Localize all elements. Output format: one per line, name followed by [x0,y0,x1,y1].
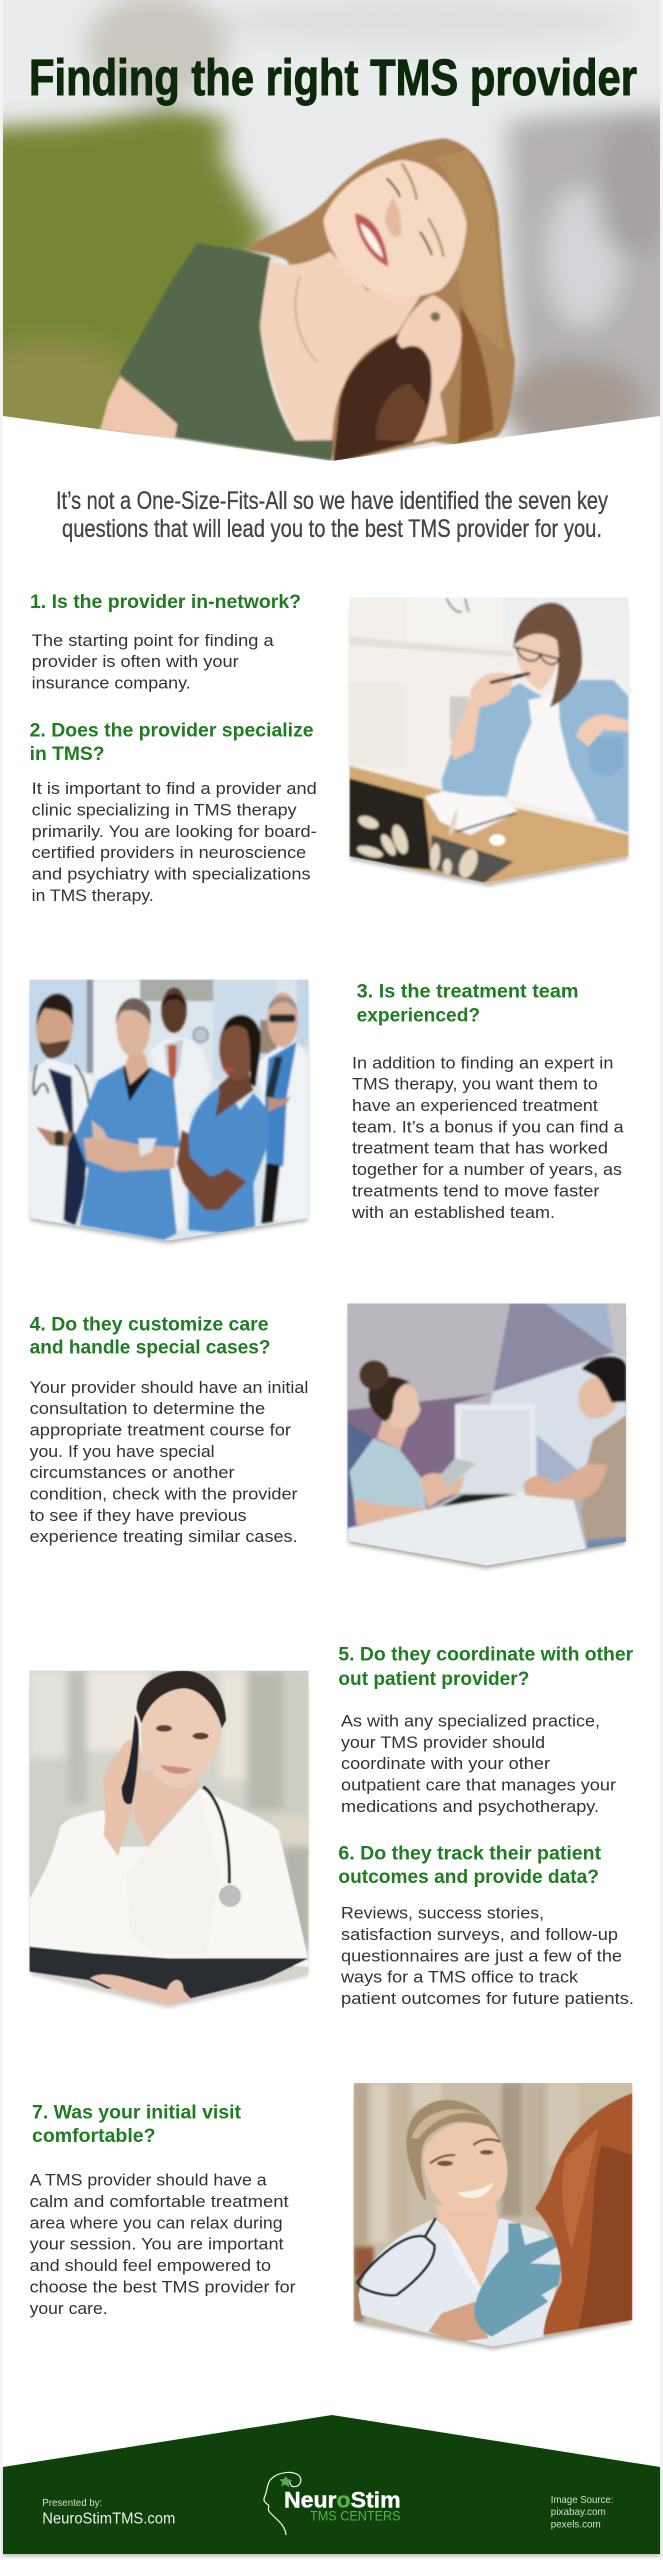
heading: question 1: 1. Is the provider in-network? [30,592,301,613]
heading: question 5: 5. Do they coordinate with other [338,1645,634,1666]
text: question 3: team. It’s a bonus if you can find a [352,1119,624,1137]
image source credits: pixabay.com [551,2506,606,2518]
icon: head outline with neuron [264,2472,301,2535]
woman: hand and wrist [397,295,462,443]
heading: question 5 [338,1645,634,1690]
text: question 7: calm and comfortable treatment [30,2193,289,2211]
patient hair [535,2093,632,2335]
phone and hand [103,1740,142,1857]
presented by: Presented by: [42,2497,102,2509]
patient arm and hand [523,1463,608,1500]
presented by [42,2497,175,2527]
woman: face [323,160,467,298]
image source credits: pexels.com [551,2519,601,2531]
arm [428,2302,488,2342]
text: question 4: condition, check with the provider [30,1486,298,1504]
text: question 6: patient outcomes for future patients. [341,1990,634,2008]
text: question 2: certified providers in neuroscience [32,844,306,862]
hand, arm, pen [450,673,513,760]
wordmark: NeuroStim [284,2488,401,2513]
text: question 5: outpatient care that manages your [341,1777,617,1795]
heading: question 4: and handle special cases? [30,1338,271,1359]
face [423,2123,508,2213]
hair [406,2100,502,2202]
back centre doctor [150,1038,212,1230]
heading: question 3: 3. Is the treatment team [357,982,579,1003]
text: question 4: Your provider should have an initial [30,1379,308,1397]
folder [29,1947,309,1998]
text: question 6: Reviews, success stories, [341,1905,544,1923]
left nurse scrubs [75,1067,180,1240]
left nurse arms [83,1137,175,1172]
text: question 4: you. If you have special [30,1443,215,1461]
photo: smiling clinician with patient [345,2075,645,2355]
text: question 1: insurance company. [32,675,191,693]
image source credits: Image Source: [551,2494,613,2506]
logo: NeuroStim TMS Centers [264,2472,401,2535]
heading: question 6: outcomes and provide data? [338,1867,599,1888]
heading: question 7: comfortable? [32,2126,156,2147]
woman: chest and neck [260,252,420,442]
panel: questions 5 and 6 [338,1645,634,2008]
text: question 5: As with any specialized practice, [341,1712,600,1730]
text: question 2: primarily. You are looking for board- [32,823,317,841]
text: question 1: provider is often with your [32,653,239,671]
face [141,1688,222,1788]
woman: hair [100,138,515,463]
hero photo: smiling woman [0,0,663,470]
text: question 4: experience treating similar cases. [30,1528,298,1546]
heading: question 2: in TMS? [30,744,105,765]
pampas grass [356,810,481,880]
text: question 2: clinic specializing in TMS therapy [32,802,298,820]
text: question 7: and should feel empowered to [30,2257,271,2275]
text: question 4 [30,1379,308,1546]
text: question 7: your session. You are important [30,2236,284,2254]
heading: question 6: 6. Do they track their patient [338,1843,602,1864]
coat [29,1788,310,1967]
text: question 3: with an established team. [351,1204,555,1222]
text: question 3: treatments tend to move faster [352,1182,600,1200]
text: question 2: in TMS therapy. [32,887,154,905]
woman: shirt [119,243,333,461]
text: question 2: It is important to find a provider and [32,780,317,798]
right nurse arms [177,1130,247,1210]
presented by: NeuroStimTMS.com [42,2510,175,2527]
text: question 4: appropriate treatment course for [30,1422,292,1440]
text: question 3 [351,1054,624,1222]
text: question 2: and psychiatry with specializations [32,865,311,883]
intro text [56,487,608,543]
notebook [425,791,518,835]
heading: question 5: out patient provider? [338,1669,529,1690]
text: question 3: together for a number of years, as [352,1161,622,1179]
text: question 6: satisfaction surveys, and follow-up [341,1926,618,1944]
counter [347,1492,587,1567]
text: question 7: your care. [30,2300,108,2318]
heading: question 4: 4. Do they customize care [30,1314,269,1335]
neck [133,1770,200,1847]
text: question 7 [30,2172,296,2318]
nurse: hand and tablet [420,1473,465,1508]
heading: question 3: experienced? [357,1005,480,1026]
text: question 5 [341,1712,617,1816]
text: question 3: have an experienced treatment [352,1097,598,1115]
photo: woman thinking at desk [340,590,640,890]
hair [513,603,582,707]
right nurse [188,1085,268,1233]
stethoscope [358,2218,436,2295]
footer band [3,2415,660,2557]
glove [474,2223,562,2337]
text: question 1 [32,632,275,693]
glasses [513,647,560,664]
face [517,634,558,690]
photo: doctor on the phone [28,1670,310,2010]
neck [435,2198,498,2288]
laptop [349,778,432,870]
text: question 7: area where you can relax during [30,2214,283,2232]
text: question 7: choose the best TMS provider for [30,2278,296,2296]
hair [137,1671,226,1728]
heading: question 7 [32,2102,242,2147]
text: question 1: The starting point for finding a [32,632,275,650]
stethoscope [203,1787,229,1883]
text: question 6: ways for a TMS office to track [340,1969,579,1987]
woman: eyebrows, eyes [402,163,417,200]
image source credits [551,2494,613,2531]
text: question 5: coordinate with your other [341,1755,551,1773]
white tee [507,693,597,820]
text: question 5: medications and psychotherapy. [341,1798,599,1816]
panel: question 7 [30,2102,296,2318]
heading: question 4 [30,1314,271,1359]
heading: question 6 [338,1843,602,1888]
jacket [442,680,629,833]
text: question 4: consultation to determine the [30,1400,265,1418]
text: question 6: questionnaires are just a few of the [341,1947,622,1965]
text: question 4: to see if they have previous [30,1507,247,1525]
photo: receptionist and patient [346,1304,628,1571]
text: question 3: TMS therapy, you want them to [352,1076,598,1094]
heading: question 2 [30,720,314,765]
heading: question 3 [357,982,579,1026]
heading: question 7: 7. Was your initial visit [32,2102,242,2123]
text: question 7: A TMS provider should have a [30,2172,267,2190]
left doctor [29,1058,95,1223]
panel: question 4 [30,1314,308,1546]
text: question 5: your TMS provider should [341,1734,545,1752]
woman: left arm [100,377,177,438]
nurse: scrubs [349,1438,427,1525]
right doctor [257,1042,309,1220]
text: question 3: In addition to finding an expert in [352,1054,613,1072]
text: question 6 [340,1905,634,2008]
text: question 3: treatment team that has worked [352,1140,608,1158]
heading: question 2: 2. Does the provider specialize [30,720,314,741]
patient head and hair [578,1378,617,1418]
desk [349,766,629,883]
nurse: neck, head, hair [377,1418,410,1450]
panel: questions 1 and 2 [30,592,317,905]
text: question 2 [32,780,317,905]
photo: medical team [28,980,310,1246]
panel: question 3 [351,982,624,1222]
coat [358,2218,562,2347]
woman: mouth [355,213,388,267]
patient shirt [582,1415,626,1543]
text: question 4: circumstances or another [30,1464,235,1482]
tagline: TMS CENTERS [310,2509,401,2524]
